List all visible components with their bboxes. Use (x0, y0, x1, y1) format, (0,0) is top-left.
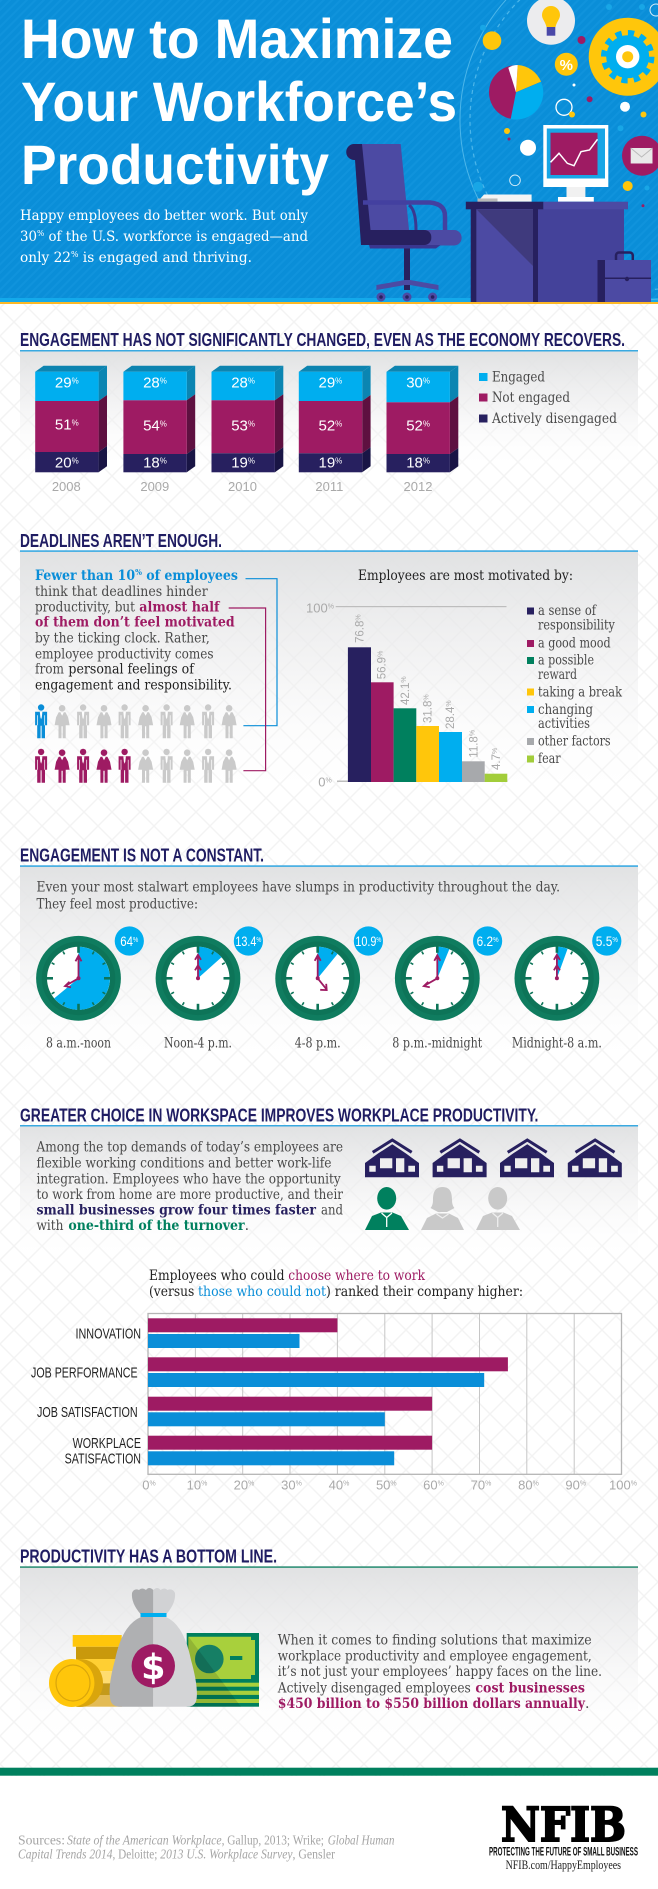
bar 2009: % (160, 456, 167, 466)
bar 2010 (212, 366, 283, 494)
badge: 5.5% (592, 926, 621, 956)
bar 2011: 52 (318, 418, 335, 434)
text block: flexible work: Among the top demands of today’s employees are (36, 1140, 343, 1156)
bar chart: motivators: 4.7 (491, 754, 503, 770)
header banner (0, 0, 658, 304)
bar 2012: 2012 (404, 479, 432, 494)
intro text (20, 208, 308, 266)
badge: 5.5%: 5.5 (596, 934, 615, 949)
sources: , Gensler (292, 1847, 335, 1862)
icon: percent badge (555, 53, 578, 76)
bar chart: motivators: % (424, 694, 430, 701)
bar chart: motivators: 76.8 (354, 621, 366, 643)
text block: slumps: They feel most productive: (36, 896, 198, 912)
bars: workplace satisfaction (148, 1436, 432, 1465)
bar 2012: % (423, 420, 430, 428)
sources: Global Human (328, 1833, 394, 1848)
text block: cost of disengagement: When it comes to finding solutions that maximize (278, 1632, 592, 1648)
legend: engagement: Actively disengaged (491, 411, 617, 427)
text block: slumps (36, 880, 560, 912)
legend: motivators: a good mood (538, 636, 611, 652)
connector: cyan (243, 579, 277, 726)
bar 2012 (386, 366, 458, 494)
clock: 8 a.m.-noon 64% (36, 936, 121, 1021)
bar 2008 (35, 366, 107, 494)
axis labels: 50 (376, 1477, 390, 1492)
panel: workspace choice (20, 1127, 638, 1262)
intro text: is engaged and thriving. (78, 250, 252, 266)
text block: deadlines: productivity, but (35, 599, 135, 615)
axis labels: 0 (142, 1477, 150, 1492)
bar 2012: 30 (406, 374, 423, 392)
legend: engagement (479, 370, 617, 427)
text block: cost of disengagement: it’s not just your employees’ happy faces on the line. (278, 1664, 602, 1680)
axis labels: % (438, 1480, 444, 1487)
text block: slumps: Even your most stalwart employees have slumps in productivity throughout the day. (36, 880, 560, 896)
badge: 10.9%: % (376, 937, 381, 944)
text block: deadlines: of them don’t feel motivated (35, 615, 235, 631)
bar 2012: % (423, 456, 430, 466)
bars: job performance (148, 1357, 508, 1387)
chart title: choose where to work: (versus (149, 1284, 194, 1300)
panel: engagement stacked bars (20, 352, 638, 494)
chart title: choose where to work: Employees who could (149, 1268, 285, 1284)
legend: motivators: reward (538, 667, 577, 683)
legend: motivators: changing (538, 702, 593, 718)
sources: , Gallup, 2013; Wrike; (222, 1833, 324, 1848)
label: noon-4 p.m.: Noon-4 p.m. (164, 1035, 232, 1051)
axis labels: 90 (565, 1477, 580, 1492)
bar 2011: % (335, 376, 342, 386)
icon: pie chart (489, 65, 543, 120)
legend: motivators: a sense of (538, 603, 597, 619)
icon: office chair (346, 144, 462, 302)
bar chart: motivators: % (326, 778, 332, 784)
sources: Sources: (18, 1833, 65, 1848)
text block: deadlines: from (35, 662, 64, 678)
icon: keyboard (478, 194, 532, 202)
text block: cost of disengagement (277, 1632, 602, 1712)
bar 2011: % (335, 456, 342, 466)
panel: deadlines (20, 552, 638, 802)
bar 2009: 28 (143, 374, 160, 392)
bar 2009: % (160, 376, 167, 386)
bar chart: motivators: % (378, 651, 384, 657)
icon: desk (466, 202, 628, 302)
badge: 64%: % (133, 937, 138, 944)
text block: cost of disengagement: cost businesses (475, 1680, 585, 1696)
intro text: 30 (20, 229, 38, 245)
chart title: choose where to work (149, 1268, 523, 1300)
icon row: one in ten employees (35, 704, 237, 738)
icon: green male employee (365, 1187, 409, 1230)
icon: briefcase (598, 252, 651, 302)
axis labels: 70 (471, 1477, 485, 1492)
axis labels: % (150, 1480, 156, 1487)
bar 2008: % (72, 418, 79, 428)
title: Productivity (21, 133, 329, 196)
text block: deadlines: employee productivity comes (35, 646, 214, 662)
badge: 13.4% (234, 926, 263, 956)
panel: bottom line (20, 1568, 638, 1748)
text block: cost of disengagement: Actively disengaged employees (277, 1680, 471, 1696)
bar 2010: 19 (231, 454, 248, 472)
badge: 10.9%: 10.9 (355, 934, 382, 949)
NFIB logo: NFIB.com/HappyEmployees (506, 1858, 621, 1872)
bar 2008: % (72, 456, 79, 466)
badge: 5.5%: % (612, 937, 618, 944)
badge: 64% (115, 926, 144, 956)
legend: motivators: taking a break (538, 684, 622, 700)
bar 2010: % (248, 376, 255, 386)
badge: 13.4%: 13.4 (235, 934, 262, 949)
icon: computer monitor (543, 125, 608, 202)
bar chart: company ranking (31, 1314, 637, 1492)
label: 8 p.m.-midnight: 8 p.m.-midnight (392, 1035, 483, 1051)
axis labels: 40 (329, 1477, 343, 1492)
bar 2010: 2010 (228, 479, 257, 494)
bar 2011: % (335, 420, 342, 428)
bar 2008: 20 (55, 454, 72, 472)
text block: flexible work: and (321, 1202, 343, 1218)
legend: engagement: Engaged (492, 370, 545, 386)
bar chart: motivators: 56.9 (376, 657, 388, 679)
chart title: choose where to work: those who could not (198, 1284, 326, 1300)
axis labels: % (485, 1480, 491, 1487)
text block: flexible work: . (245, 1218, 249, 1234)
panel: clocks (20, 867, 638, 1067)
icon: envelope badge (622, 136, 658, 176)
bar 2008: 51 (55, 416, 72, 434)
text block: cost of disengagement: workplace productivity and employee engagement, (278, 1648, 592, 1664)
bar 2011: 19 (318, 454, 335, 472)
title: Your Workforce’s (21, 70, 457, 133)
icons: houses (365, 1140, 622, 1177)
icon: light bulb (527, 0, 575, 45)
text block: flexible work (36, 1140, 343, 1234)
intro text: of the U.S. workforce is engaged—and (44, 229, 308, 245)
chart title: choose where to work: choose where to work (288, 1268, 425, 1284)
text block: deadlines: think that deadlines hinder (35, 584, 208, 600)
section heading: deadlines: DEADLINES AREN’T ENOUGH. (20, 531, 222, 551)
bar 2010: % (248, 420, 255, 428)
text block: deadlines: of employees (142, 568, 238, 584)
text block: deadlines: Fewer than 10 (35, 568, 147, 584)
bar chart: motivators: 11.8 (468, 736, 480, 758)
section heading: bottom line: PRODUCTIVITY HAS A BOTTOM LINE. (20, 1546, 277, 1566)
bar 2012: % (423, 376, 430, 386)
axis labels: % (201, 1480, 207, 1487)
clock: 8 p.m.-midnight 6.2% (395, 936, 480, 1021)
category labels: WORKPLACE (73, 1435, 141, 1452)
bar 2012: 18 (406, 454, 423, 472)
bar chart: motivators: % (328, 604, 334, 610)
intro text: % (71, 250, 79, 259)
axis labels: % (533, 1480, 539, 1487)
icon: percent badge: % (560, 57, 573, 74)
bar 2009: 2009 (140, 479, 169, 494)
text block: flexible work: flexible working conditions and better work-life (36, 1156, 332, 1172)
category labels: JOB PERFORMANCE (31, 1365, 138, 1382)
bar chart: motivators: % (446, 700, 453, 707)
text block: deadlines: % (135, 567, 142, 577)
icon: coin stack (49, 1635, 122, 1707)
bar chart: motivators: 42.1 (400, 683, 412, 705)
legend: motivators: activities (538, 716, 590, 732)
decorative dots (473, 4, 658, 207)
label: midnight-8 a.m.: Midnight-8 a.m. (512, 1035, 602, 1051)
icon row: half of employees (35, 749, 237, 783)
legend: motivators (527, 603, 622, 767)
badge: 10.9% (354, 926, 383, 956)
bar chart: motivators: 100 (306, 600, 328, 616)
green footer divider (0, 1768, 658, 1776)
bar 2010: % (248, 456, 255, 466)
legend: motivators: a possible (538, 653, 594, 669)
bar 2009: 54 (143, 418, 160, 434)
category labels: INNOVATION (76, 1325, 141, 1342)
intro text: % (37, 229, 45, 238)
bar chart: motivators: 28.4 (445, 707, 457, 729)
axis labels: % (631, 1480, 637, 1487)
label: 8 a.m.-noon: 8 a.m.-noon (46, 1035, 111, 1051)
text block: flexible work: with (36, 1218, 64, 1234)
intro text: only 22 (20, 250, 72, 266)
category labels: SATISFACTION (65, 1450, 141, 1467)
title: How to Maximize (21, 7, 453, 70)
bar chart: motivators: % (470, 730, 476, 736)
icon: gear (589, 18, 658, 96)
text block: flexible work: to work from home are more productive, and their (36, 1187, 343, 1203)
bar chart: motivators (306, 600, 507, 790)
category labels: JOB SATISFACTION (37, 1404, 138, 1421)
chart title: choose where to work: ) ranked their company higher: (326, 1284, 523, 1300)
icon: gray female employee (421, 1187, 464, 1230)
bar chart: motivators: % (492, 748, 499, 754)
bar 2009 (123, 366, 195, 494)
intro text: Happy employees do better work. But only (20, 208, 308, 224)
sources: , Deloitte; (112, 1847, 157, 1862)
bar chart: motivators: % (356, 614, 362, 621)
badge: 6.2%: 6.2 (477, 934, 495, 949)
icon: money bag: $ (141, 1648, 165, 1688)
bar chart: motivators: 0 (318, 774, 326, 790)
section heading: engagement not constant: ENGAGEMENT IS NOT A CONSTANT. (20, 845, 264, 865)
bar 2008: % (72, 376, 79, 386)
bar 2010: 28 (231, 374, 248, 392)
label: 4-8 p.m.: 4-8 p.m. (295, 1035, 341, 1051)
clock: noon-4 p.m. 13.4% (156, 936, 240, 1021)
legend: engagement: Not engaged (492, 390, 570, 406)
text block: flexible work: one-third of the turnover (68, 1218, 245, 1234)
badge: 13.4%: % (256, 937, 261, 944)
text block: deadlines: engagement and responsibility. (35, 677, 232, 693)
axis labels: 60 (423, 1477, 438, 1492)
axis labels: 100 (609, 1477, 631, 1492)
bar 2008: 29 (55, 374, 72, 392)
badge: 6.2% (473, 926, 502, 956)
bar 2011: 29 (318, 374, 335, 392)
bar chart: motivators: 31.8 (422, 701, 434, 723)
bar 2011: 2011 (315, 479, 343, 494)
bar 2010: 53 (231, 418, 248, 434)
chart title: motivated by: Employees are most motivated by: (358, 568, 573, 584)
axis labels: % (248, 1480, 254, 1487)
badge: 64%: 64 (120, 934, 135, 949)
text block: deadlines: by the ticking clock. Rather, (35, 630, 210, 646)
icon: money bag (110, 1588, 197, 1707)
axis labels: 10 (187, 1477, 201, 1492)
sources: Capital Trends 2014 (18, 1847, 112, 1862)
icon: banknotes (187, 1633, 259, 1707)
axis labels: % (390, 1480, 397, 1487)
legend: motivators: fear (538, 751, 561, 767)
text block: deadlines (35, 567, 238, 693)
axis labels: % (343, 1480, 349, 1487)
bars: job satisfaction (148, 1397, 432, 1426)
NFIB logo (489, 1797, 638, 1872)
NFIB logo: NFIB (501, 1797, 626, 1852)
badge: 6.2%: % (493, 937, 499, 944)
text block: flexible work: integration. Employees who have the opportunity (36, 1171, 341, 1187)
bar chart: motivators: % (401, 676, 408, 683)
axis labels: 80 (518, 1477, 533, 1492)
clock: midnight-8 a.m. 5.5% (514, 936, 599, 1021)
bar 2009: 18 (143, 454, 160, 472)
title (21, 7, 457, 196)
sources (18, 1833, 394, 1862)
connector: magenta (229, 608, 266, 771)
legend: motivators: responsibility (538, 618, 615, 634)
bar 2011 (299, 366, 371, 494)
legend: motivators: other factors (538, 734, 611, 750)
text block: cost of disengagement: $450 billion to $550 billion dollars annually (278, 1696, 586, 1712)
axis labels: 30 (281, 1477, 296, 1492)
axis labels (142, 1477, 637, 1492)
category labels (31, 1325, 141, 1467)
text block: flexible work: small businesses grow four times faster (36, 1202, 317, 1218)
bars: innovation (148, 1318, 337, 1348)
bar 2009: % (160, 420, 167, 428)
axis labels: 20 (234, 1477, 248, 1492)
bar 2012: 52 (406, 418, 423, 434)
sources: 2013 U.S. Workplace Survey (160, 1847, 293, 1862)
text block: deadlines: personal feelings of (68, 662, 196, 678)
bar 2008: 2008 (52, 479, 81, 494)
clock: 4-8 p.m. 10.9% (275, 936, 360, 1021)
axis labels: % (580, 1480, 586, 1487)
icon: gray male employee (476, 1187, 520, 1230)
axis labels: % (296, 1480, 302, 1487)
text block: cost of disengagement: . (585, 1696, 589, 1712)
sources: State of the American Workplace (67, 1833, 222, 1848)
text block: deadlines: almost half (139, 599, 220, 615)
